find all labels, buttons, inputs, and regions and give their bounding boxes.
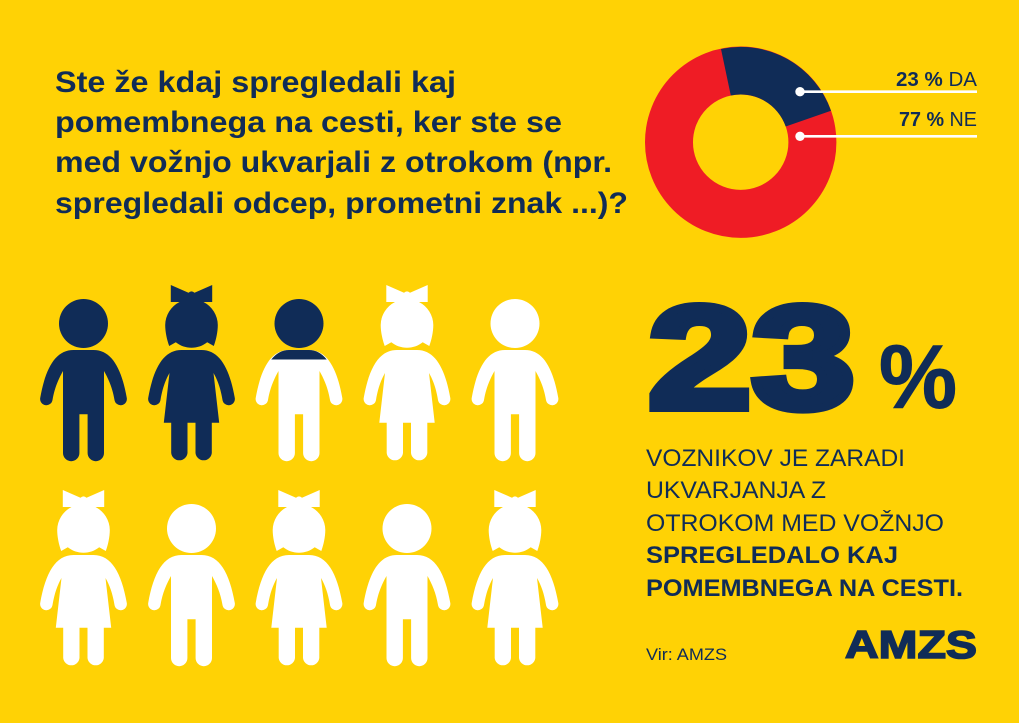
legend: 77 % NE: 77 % NE bbox=[899, 109, 977, 131]
big number 23: 23 bbox=[648, 276, 855, 439]
title question: Ste že kdaj spregledali kaj bbox=[55, 66, 456, 99]
AMZS logo: AMZS bbox=[845, 624, 977, 667]
child 6: white girl bbox=[40, 490, 127, 665]
description text bbox=[646, 445, 963, 602]
title question bbox=[55, 66, 628, 220]
child 8: white girl bbox=[256, 490, 342, 665]
legend: 23 % DA: 23 % DA bbox=[896, 69, 978, 91]
title question: spregledali odcep, prometni znak ...)? bbox=[55, 187, 628, 220]
child 3: boy, partly navy bbox=[256, 299, 342, 461]
child 7: white boy bbox=[148, 504, 235, 666]
pictogram: ten children bbox=[40, 285, 558, 666]
child 1: navy boy bbox=[40, 299, 127, 461]
description text: VOZNIKOV JE ZARADI bbox=[646, 445, 905, 472]
child 4: white girl bbox=[364, 285, 450, 460]
description text: OTROKOM MED VOŽNJO bbox=[646, 510, 944, 537]
legend: 77 % NE bbox=[795, 109, 977, 141]
description text: SPREGLEDALO KAJ bbox=[646, 542, 898, 569]
legend: 23 % DA bbox=[795, 69, 978, 96]
source: Vir: AMZS bbox=[646, 645, 727, 664]
title question: pomembnega na cesti, ker ste se bbox=[55, 106, 562, 139]
child 5: white boy bbox=[472, 299, 558, 461]
description text: UKVARJANJA Z bbox=[646, 477, 826, 504]
child 10: white girl bbox=[472, 490, 558, 665]
donut chart bbox=[669, 47, 831, 214]
description text: POMEMBNEGA NA CESTI. bbox=[646, 575, 963, 602]
title question: med vožnjo ukvarjali z otrokom (npr. bbox=[55, 146, 612, 179]
percent sign: % bbox=[879, 328, 957, 428]
child 9: white boy bbox=[364, 504, 450, 666]
child 2: navy girl bbox=[148, 285, 235, 460]
